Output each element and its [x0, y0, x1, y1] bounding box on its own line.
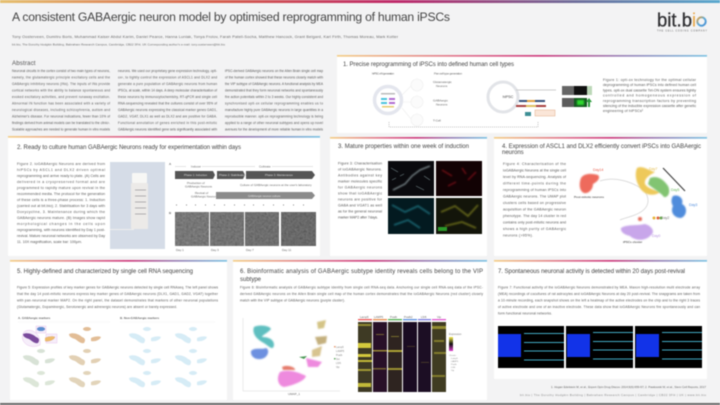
heatmap: Vip: [437, 315, 441, 319]
timeline chart: Phase 3: Maintenance: [265, 173, 293, 177]
figure 2 caption: GABAergic neurons mature. (B) Images show rapid: [17, 216, 105, 220]
figure 6 caption: match with the VIP subtype of GABAergic neurons (purple cluster).: [240, 298, 345, 302]
figure 2 caption: revival. Mature neuronal networks are observed by Day: [17, 234, 105, 238]
umap group A: GABAergic markers: [18, 316, 110, 387]
MEA snapshot 3: [635, 326, 702, 368]
abstract column 3: reproducible manner. opti-ox reprogramming technology is being: [225, 114, 323, 118]
microscopy time series: Day 1: [176, 248, 184, 252]
umap plot by subtype: Sst: [336, 358, 340, 361]
umap plot by subtype: [243, 318, 345, 396]
umap group A: GABAergic markers: A. GABAergic markers: [18, 316, 51, 320]
figure 2 caption: delivered in a cryopreserved format and are: [17, 180, 105, 184]
panel 4 heading: 4. Expression of ASCL1 and DLX2 efficiently convert iPSCs into GABAergic: [502, 144, 701, 150]
affiliation: bit.bio, The Dorothy Hodgkin Building, Babraham Research Campus, Cambridge, CB22 3FH, UK Corresponding author's e-mail: tony.oosterveen@bit.bio: [12, 42, 225, 46]
abstract column 2: RNA-sequencing revealed that the cultures consist of over 95% of: [118, 102, 217, 106]
abstract column 2: GABAergic neurons identified gene sets significantly associated with: [118, 128, 217, 132]
UMAP chart by day: Day7: [649, 167, 657, 171]
figure 2 caption: recommended media. The protocol for the generation: [17, 192, 105, 196]
figure 3 caption: neurons are positive for: [338, 198, 383, 202]
logo: bit.bio: [657, 10, 707, 32]
figure 1 caption: controlled and homogeneous expression of: [603, 94, 696, 98]
figure 1 caption: [603, 78, 697, 113]
authors: Tony Oosterveen, Dumitru Boris, Muhammad Kaiser Abdul Karim, Daniel Pearce, Hanna Luniak, Tonya Frolov, Farah Patell-Socha, Matthew Hancock, Grant Belgard, Karl Firth, Thomas Moreau, Mark Kotter: [12, 34, 399, 39]
panel 4 heading: [502, 144, 701, 156]
figure 2 caption: reprogramming and arrive ready to plate. (A) Cells are: [17, 174, 105, 178]
abstract column 2: [118, 69, 217, 132]
microscopy time series: [169, 211, 316, 252]
diagram: cell type outcomes: T-Cell: [433, 118, 441, 122]
abstract column 3: the VIP subtype of GABAergic neurons. A functional analysis by MEA: [225, 82, 324, 86]
figure 2 caption: of these cells is a three-phase process: 1. Induction: [17, 198, 105, 202]
diagram: cell type outcomes: Neurons: [436, 84, 448, 88]
UMAP chart by day: [574, 167, 697, 244]
timeline chart: Cultivate: [259, 164, 271, 168]
figure 3 caption: marker MAP2 after 7days.: [338, 216, 378, 220]
heatmap: Pvalb: [390, 315, 397, 319]
figure 3 caption: of ioGABAergic Neurons.: [338, 168, 382, 172]
UMAP chart by day: Post-mitotic neurons: [574, 195, 604, 199]
figure 7 caption: Figure 7: Functional activity of the ioGABAergic Neurons demonstrated by MEA. Maxon high-resolution multi electrode array: [498, 286, 700, 290]
figure 2 caption: hiPSCs by ASCL1 and DLX2 driven optimal: [17, 168, 105, 172]
microscopy time series: Day 7: [246, 248, 254, 252]
abstract column 3: demonstrated that they form neuronal networks and spontaneously: [225, 88, 323, 92]
figure 1 caption: Figure 1: opti-ox technology for the optimal cellular: [603, 78, 697, 82]
timeline chart: A: [169, 162, 172, 166]
diagram: cell type outcomes: GABAergic: [433, 98, 448, 102]
microscopy images: [562, 86, 592, 107]
UMAP chart by day: Day5: [671, 188, 679, 192]
diagram: hiPSC ring and cassette: hiPSC: [503, 95, 514, 99]
UMAP chart by day: Day14: [593, 168, 603, 172]
abstract column 2: iPSCs, at scale, within 14 days. A deep molecular characterisation of: [118, 88, 217, 92]
abstract column 2: Functional annotation of genes enriched in this post-mitotic: [118, 121, 217, 125]
umap plot by subtype: LAMP5: [336, 350, 345, 353]
figure 4 caption: shows a high purity of GABAergic: [503, 227, 566, 231]
figure 1 caption: deprogramming of human iPSCs into defined human cell: [603, 83, 696, 87]
heatmap colour legend: Vip: [451, 370, 455, 372]
heatmap colour legend: [449, 333, 462, 372]
figure 4 caption: reprogramming of human iPSCs into: [503, 188, 566, 192]
microscopy time series: Day 11: [282, 248, 292, 252]
dashed connector: [389, 122, 538, 127]
figure 2 caption: reprogramming, with neurons identified by Day 1 post-: [17, 228, 106, 232]
figure 3 caption: show that ioGABAergic: [338, 192, 382, 196]
abstract column 3: iPSC-derived GABAergic neurons on the Allen Brain single cell map: [225, 69, 323, 73]
MEA snapshot 1: [498, 326, 564, 368]
abstract column 2: neurons. We used our proprietary gene expression technology, opti-: [118, 69, 217, 73]
abstract column 1: GABAergic inhibitory neurons (INs). The inputs of INs provide: [12, 82, 110, 86]
figure 5 caption: (Glutamatergic, Dopaminergic, Serotonergic and adrenergic neurons) are absent or barely expressed.: [17, 305, 177, 309]
figure 7 caption: form functional neuronal networks.: [498, 312, 552, 316]
title: A consistent GABAergic neuron model by optimised reprogramming of human iPSCs: [12, 10, 450, 24]
panel 6 heading: 6. Bioinformatic analysis of GABAergic subtype identity reveals cells belong to the VIP: [240, 269, 483, 275]
figure 5 caption: with pan-neuronal marker MAP2. On the right panel, the dataset demonstrates that markers of other neuronal populations: [17, 298, 218, 302]
figure 7 caption: (MEA) recordings of cocultures of rat astrocytes and ioGABAergic Neurons at day 20 post-revival. The snapgrams are taken from: [498, 292, 700, 296]
figure 4 caption: GABAergic neurons. The UMAP plot: [503, 194, 566, 198]
top gradient bar: [0, 0, 720, 3]
umap group B: non-GABAergic markers: B. Non-GABAergic markers: [120, 316, 160, 320]
figure 6 caption: derived GABAergic neurons on the Allen Brain single cell map of the human cortex demonstrates that the ioGABAergic Neurons (red cluster) closely: [240, 292, 483, 296]
figure 4 caption: neurons (>95%).: [503, 234, 533, 238]
panel 3: mature properties: [330, 137, 487, 256]
figure 4 caption: acquisition of the GABAergic neuron: [503, 208, 566, 212]
figure 7 caption: of active electrode and one of an inactive electrode. These data show that ioGABAergic Neurons fire spontaneously and can: [498, 305, 700, 309]
abstract column 1: cortical networks with the ability to balance spontaneous and: [12, 88, 110, 92]
timeline chart: GABAergic Neurons: [185, 184, 213, 188]
figure 1 caption: reprogramming transcription factors by preventing: [603, 99, 696, 103]
footer contact line: bit.bio | The Dorothy Hodgkin Building | Babraham Research Campus | Cambridge | CB22 3FH | UK | www.bit.bio: [520, 393, 706, 397]
figure 7 caption: a 10-minute recording, each snapshot shows on the left a heatmap of the active electrodes on the chip and to the right 3 traces: [498, 298, 700, 302]
abstract column 2: these neurons by immunocytochemistry, RT-qPCR and single cell: [118, 95, 217, 99]
timeline chart: Production of: [187, 181, 205, 185]
abstract column 2: ox², to tightly control the expression of ASCL1 and DLX2 and: [118, 76, 217, 80]
figure 4 caption: level by RNA-sequencing. Analysis of: [503, 175, 566, 179]
heatmap colour legend: Cluster: [449, 354, 456, 357]
heatmap colour legend: Pvalb: [451, 364, 457, 366]
panel 1 subheads: Pan cell type generation: [434, 72, 462, 76]
panel 1 subheads: [372, 72, 462, 76]
abstract column 3: applied to a range of other neuronal subtypes and opens up novel: [225, 121, 323, 125]
diagram: opti-ox circle: [374, 86, 402, 114]
abstract column 1: [12, 69, 110, 132]
figure 2 caption: Figure 2. ioGABAergic Neurons are derived from: [17, 162, 105, 166]
figure 3 caption: [338, 162, 383, 220]
diagram: cell type outcomes: Glutamatergic: [433, 80, 452, 84]
panel 1 heading: 1. Precise reprogramming of iPSCs into defined human cell types: [343, 62, 514, 68]
abstract: [12, 60, 324, 132]
umap plot by subtype: L5/6: [336, 362, 341, 365]
figure 3 caption: GABA and VGAT1 as well: [338, 204, 382, 208]
timeline chart: Inducer: [191, 164, 201, 168]
abstract heading: Abstract: [12, 60, 36, 67]
abstract column 3: [225, 69, 324, 132]
abstract column 1: neurological diseases, including schizophrenia, autism and: [12, 108, 110, 112]
heatmap colour legend: Lamp5: [451, 358, 458, 360]
panel 4 heading: neurons: [502, 150, 524, 156]
figure 1 caption: engineering of hiPSCs²: [603, 109, 644, 113]
panel 1 subheads: hiPSC+ iN generation: [372, 72, 394, 76]
timeline chart: GABAergic Neurons: [191, 194, 219, 198]
UMAP chart by day: Day0: [652, 234, 660, 238]
panel 3 heading: 3. Mature properties within one week of induction: [338, 144, 469, 150]
abstract column 1: Neuronal circuits in the cortex consist of two main types of neurons,: [12, 69, 110, 73]
figure 4 caption: [503, 162, 566, 238]
figure 2 caption: [17, 162, 106, 244]
figure 2 caption: 11. 10X magnification, scale bar: 100μm.: [17, 240, 82, 244]
abstract column 3: avenues for the development of more reliable human in vitro models: [225, 128, 323, 132]
panel 7 heading: 7. Spontaneous neuronal activity is detected within 20 days post-revival: [498, 269, 685, 275]
figure 6 caption: Figure 6: Bioinformatic analysis of GABAergic subtype identity from single cell RNA-seq data. Anchoring our single cell RNA-seq data of the iPSC-: [240, 286, 483, 290]
UMAP chart by day: Day2: [661, 216, 669, 220]
diagram: cell type outcomes: Neurons: [436, 102, 448, 106]
panel 4: ASCL1 and DLX2 expression: [494, 137, 707, 256]
abstract column 1: evoked excitatory activities, and prevent runaway excitation.: [12, 95, 110, 99]
timeline chart: [169, 162, 315, 205]
timeline chart: GABAergic neuron culture: [248, 194, 281, 198]
heatmap: L5/6: [421, 315, 427, 319]
figure 1 caption: types. opti-ox dual cassette Tet-ON system ensures tightly: [603, 88, 696, 92]
heatmap: Pvalb2: [404, 315, 413, 319]
figure 4 caption: phenotype. The day 14 cluster in red: [503, 214, 566, 218]
diagram: cell type outcomes: [402, 79, 452, 126]
figure 6 caption: [240, 286, 483, 302]
diagram: hiPSC ring and cassette: [488, 82, 556, 116]
logo: bit.bio: THE CELL CODING COMPANY: [657, 30, 707, 32]
bottom bar: [0, 403, 720, 405]
product vial photo: [110, 162, 165, 249]
panel 6 heading: [240, 269, 483, 283]
UMAP chart by day: Day3: [689, 203, 697, 207]
figure 1 caption: silencing of the inducible expression cassette after genetic: [603, 104, 696, 108]
panel 6 heading: subtype: [240, 277, 262, 283]
abstract column 1: Scalable approaches are needed to generate human in vitro models: [12, 128, 110, 132]
abstract column 3: fire action potentials within 2 to 3 weeks. Our highly consistent and: [225, 95, 323, 99]
logo: bit.bio: i: [692, 10, 696, 32]
abstract column 3: manufacture highly pure GABAergic neurons in large quantities in a: [225, 108, 323, 112]
timeline chart: Phase 1: Induction: [184, 173, 208, 177]
panel 5: single cell RNA sequencing: [10, 260, 227, 400]
figure 3 caption: Antibodies against key: [338, 174, 382, 178]
umap plot by subtype: Vip: [336, 366, 340, 369]
UMAP chart by day: iPSCs cluster: [623, 240, 643, 244]
panel 1: precise reprogramming: [337, 55, 707, 133]
figure 3 caption: marker molecules specific: [338, 180, 382, 184]
abstract column 2: GAD2, VGAT, DLX1 as well as DLX2 and are positive for GABA.: [118, 114, 217, 118]
figure 5 caption: that the day 14 post-mitotic neurons express key marker genes of GABAergic neurons (DLX1, GAD1, GAD2, VGAT) together: [17, 292, 219, 296]
umap plot by subtype: UMAP_1: [288, 392, 300, 396]
abstract column 1: namely, the glutamatergic principle excitatory cells and the: [12, 76, 110, 80]
references: 1. Hogan Edelstein M, et al., Expert Opin Drug Discov. 2014;9(6):659-67; 2. Pawlowski M, et al., Stem Cell Reports, 2017: [551, 385, 706, 389]
figure 3 caption: for GABAergic neurons: [338, 186, 382, 190]
heatmap: Lamp5: [360, 315, 369, 319]
figure 4 caption: Figure 4: Characterisation of the: [503, 162, 566, 166]
figure 2 caption: morphological changes in the cells upon: [17, 222, 105, 226]
heatmap colour legend: Expression: [449, 333, 462, 336]
figure 4 caption: clusters cells based on progressive: [503, 201, 566, 205]
panel 2: ready to culture: [8, 136, 320, 256]
abstract column 1: findings derived from animal models can be translated to the clinic¹.: [12, 121, 110, 125]
figure 2 caption: programmed to rapidly mature upon revival in the: [17, 186, 105, 190]
MEA recordings: [498, 326, 702, 368]
figure 2 caption: Doxycycline, 3. Maintenance during which the: [17, 210, 105, 214]
panel 5 heading: 5. Highly-defined and characterized by single cell RNA sequencing: [17, 269, 193, 275]
figure 2 caption: (carried out at bit.bio); 2. Stabilisation for 3 days with: [17, 204, 105, 208]
abstract column 1: Alzheimer's disease. For neuronal indications, fewer than 10% of: [12, 114, 110, 118]
heatmap: [358, 315, 462, 392]
umap plot by subtype: Lamp5: [336, 346, 344, 349]
figure 4 caption: ioGABAergic Neurons at the single cell: [503, 168, 566, 172]
MEA snapshot 2: [566, 326, 633, 368]
heatmap: LAMP5: [374, 315, 384, 319]
abstract column 2: generate a pure population of GABAergic neurons from human: [118, 82, 217, 86]
umap group B: non-GABAergic markers: [120, 316, 215, 387]
abstract column 1: Abnormal IN function has been associated with a variety of: [12, 102, 110, 106]
logo: bit.bio: bit.b: [657, 10, 692, 32]
panel 2 heading: 2. Ready to culture human GABAergic Neurons ready for experimentation within days: [17, 145, 241, 151]
microscopy time series: Day 3: [211, 248, 219, 252]
figure 5 caption: Figure 5: Expression profiles of key marker genes for GABAergic neurons detected by single cell RNAseq. The left panel shows: [17, 286, 218, 290]
timeline chart: Revival of: [195, 191, 208, 195]
abstract column 2: GABAergic neurons expressing the classical marker genes GAD1,: [118, 108, 217, 112]
heatmap colour legend: L5/6: [451, 367, 456, 369]
figure 3 caption: as for the general neuronal: [338, 210, 382, 214]
heatmap colour legend: LAMP5: [451, 360, 459, 363]
timeline chart: Phase 2: Stabilisation: [219, 173, 246, 177]
timeline chart: Culture of GABAergic neurons at the user's laboratory: [240, 183, 312, 187]
figure 4 caption: contains only post-mitotic neurons and: [503, 220, 566, 224]
abstract column 3: of the human cortex showed that these neurons closely match with: [225, 76, 323, 80]
microscopy time series: B: [169, 211, 172, 215]
figure 4 caption: different time-points during the: [503, 182, 566, 186]
panel 7: spontaneous neuronal activity: [494, 260, 707, 379]
umap plot by subtype: Pvalb: [336, 354, 343, 357]
figure 3 caption: Figure 3: Characterisation: [338, 162, 382, 166]
figure 5 caption: [17, 286, 219, 309]
figure 7 caption: [498, 286, 700, 316]
abstract column 3: synchronised opti-ox cellular reprogramming enables us to: [225, 102, 323, 106]
panel 6: bioinformatic analysis: [233, 260, 487, 400]
immunofluorescence images: [388, 161, 482, 234]
